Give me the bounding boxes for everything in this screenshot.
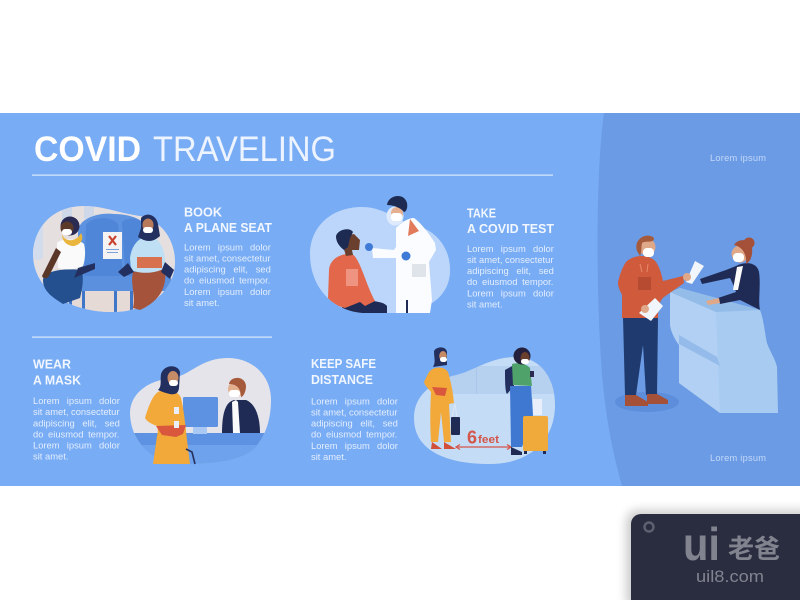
panel: darker right side (598, 113, 800, 486)
person: doctor (365, 196, 436, 313)
heading: book a plane seat (184, 206, 272, 235)
text block: keep safe distance: do eiusmod tempor. (311, 429, 397, 440)
watermark: uil8 badge (626, 510, 800, 600)
text block: keep safe distance: adipiscing elit, sed (311, 417, 398, 428)
text block: book a plane seat (184, 242, 271, 308)
text block: keep safe distance: sit amet. (311, 451, 346, 462)
sign: no seat (103, 232, 122, 259)
illustration: safe distance (410, 347, 560, 467)
text block: wear a mask (33, 395, 120, 462)
text block: take a covid test: do eiusmod tempor. (467, 276, 553, 287)
illustration: check-in counter (615, 236, 778, 413)
illustration: check-in desk (130, 358, 271, 464)
text block: wear a mask: sit amet. (33, 451, 68, 462)
heading: keep safe distance: KEEP SAFE (311, 357, 376, 371)
text block: wear a mask: Lorem ipsum dolor (33, 440, 120, 451)
text block: keep safe distance: sit amet, consectetur (311, 406, 398, 417)
text block: take a covid test: Lorem ipsum dolor (467, 288, 554, 298)
person: woman with bag (424, 347, 460, 449)
text block: take a covid test: sit amet, consectetur (467, 254, 554, 265)
heading: wear a mask (33, 358, 81, 388)
heading: keep safe distance: DISTANCE (311, 373, 373, 387)
section: keep safe distance (311, 347, 560, 467)
label: 6 feet distance: 6 (467, 428, 477, 448)
text block: book a plane seat: sit amet, consectetur (184, 252, 270, 264)
text block: book a plane seat: sit amet. (184, 297, 219, 308)
text block: take a covid test (467, 243, 554, 310)
text block: wear a mask: do eiusmod tempor. (33, 428, 119, 439)
text block: book a plane seat: Lorem ipsum dolor (184, 286, 271, 297)
text block: wear a mask: sit amet, consectetur (33, 406, 120, 417)
text block: wear a mask: adipiscing elit, sed (33, 417, 120, 428)
person: traveler (618, 236, 704, 406)
monitor (183, 397, 218, 434)
section: book a plane seat (30, 200, 272, 316)
person: clerk (222, 378, 260, 433)
watermark: uil8 badge: 老爸 (728, 529, 780, 566)
label: 6 feet distance (456, 428, 511, 450)
person: right passenger (118, 215, 174, 310)
title (34, 130, 336, 169)
heading: wear a mask: A MASK (33, 374, 81, 388)
text block: book a plane seat: Lorem ipsum dolor (184, 242, 271, 252)
person: receptionist (700, 238, 760, 310)
panel: blue background (0, 113, 800, 486)
heading: book a plane seat: BOOK (184, 206, 222, 220)
text block: take a covid test: Lorem ipsum dolor (467, 243, 554, 254)
section: take a covid test (310, 196, 554, 316)
label: 6 feet distance: feet (478, 434, 499, 446)
watermark: uil8 badge: ui (683, 518, 720, 570)
heading: take a covid test: TAKE (467, 206, 496, 220)
watermark: uil8 badge: uil8.com (696, 568, 764, 586)
text block: keep safe distance: Lorem ipsum dolor (311, 395, 398, 406)
text block: book a plane seat: adipiscing elit, sed (184, 264, 271, 274)
person: left passenger (42, 216, 95, 304)
illustration: covid test (310, 196, 450, 316)
text block: take a covid test: adipiscing elit, sed (467, 265, 554, 276)
title: TRAVELING (153, 130, 336, 169)
heading: take a covid test: A COVID TEST (467, 222, 554, 236)
person: patient (328, 229, 387, 316)
text block: keep safe distance (311, 395, 398, 462)
person: woman in yellow (145, 366, 195, 464)
title: COVID (34, 130, 141, 169)
person: woman with suitcase (505, 348, 548, 455)
desk (670, 288, 778, 413)
text block: take a covid test: sit amet. (467, 298, 502, 310)
heading: take a covid test (467, 206, 554, 236)
heading: book a plane seat: A PLANE SEAT (184, 221, 272, 235)
heading: wear a mask: WEAR (33, 358, 71, 372)
text block: book a plane seat: do eiusmod tempor. (184, 274, 270, 286)
section: airport check-in (615, 153, 778, 463)
text block: wear a mask: Lorem ipsum dolor (33, 395, 120, 406)
heading: keep safe distance (311, 357, 376, 387)
text block: keep safe distance: Lorem ipsum dolor (311, 440, 398, 451)
label: lorem ipsum bottom: Lorem ipsum (710, 453, 766, 463)
label: lorem ipsum top: Lorem ipsum (710, 153, 766, 163)
section: wear a mask (33, 355, 275, 467)
illustration: plane seats (33, 206, 175, 312)
